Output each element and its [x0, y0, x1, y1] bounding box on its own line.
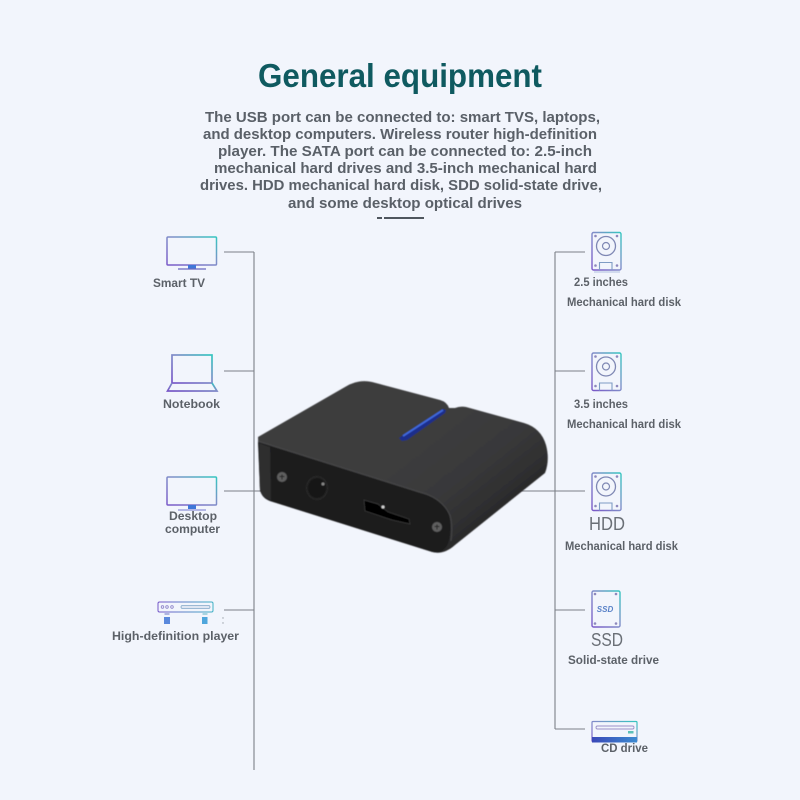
left connector lines — [224, 252, 262, 770]
item: Desktop computer — [165, 477, 220, 536]
label: Notebook: Notebook — [163, 397, 220, 411]
item: High-definition player — [112, 602, 239, 643]
item: Smart TV — [153, 237, 216, 290]
icon: SSD: SSD — [597, 605, 613, 614]
label: HDD: HDD — [589, 514, 625, 534]
item: HDD — [565, 473, 678, 553]
icon: 2.5 inch hard disk — [592, 232, 621, 272]
description text: drives. HDD mechanical hard disk, SDD solid-state drive, — [200, 177, 602, 194]
description text: mechanical hard drives and 3.5-inch mechanical hard — [214, 160, 597, 177]
label: 2.5 inches: 2.5 inches — [574, 275, 628, 289]
right screw — [432, 522, 442, 532]
device left strip — [259, 443, 271, 500]
label: Desktop computer — [165, 509, 220, 536]
label: Mechanical hard disk: Mechanical hard disk — [567, 417, 681, 431]
icon: 3.5 inch hard disk — [592, 353, 621, 390]
label: SSD: SSD — [591, 630, 623, 650]
left screw — [277, 472, 287, 482]
device edge highlight — [258, 441, 452, 541]
device front face — [258, 442, 451, 552]
label: Mechanical hard disk: Mechanical hard disk — [567, 295, 681, 309]
device: black enclosure — [258, 381, 548, 553]
icon: notebook — [168, 355, 217, 391]
label: Smart TV: Smart TV — [153, 276, 205, 290]
title: General equipment — [258, 57, 542, 94]
description text: player. The SATA port can be connected to: 2.5-inch — [218, 143, 592, 160]
label: Mechanical hard disk: Mechanical hard disk — [565, 539, 678, 553]
item: 2.5 inch disk — [567, 232, 681, 309]
item: Notebook — [163, 355, 220, 411]
description text — [200, 109, 602, 212]
item: CD drive — [592, 722, 648, 755]
label: Solid-state drive: Solid-state drive — [568, 653, 659, 667]
device body — [258, 381, 548, 553]
label: CD drive: CD drive — [601, 741, 648, 755]
icon: desktop monitor — [167, 477, 216, 510]
icon: HDD — [592, 473, 621, 510]
item: SSD — [568, 591, 659, 667]
divider under description — [377, 217, 424, 219]
icon: smart TV — [167, 237, 216, 269]
description text: The USB port can be connected to: smart TVS, laptops, — [205, 109, 600, 126]
icon: CD drive — [592, 722, 637, 742]
icon: high-definition player — [158, 602, 224, 624]
description text: and some desktop optical drives — [288, 195, 522, 212]
label: 3.5 inches: 3.5 inches — [574, 397, 628, 411]
label: High-definition player: High-definition player — [112, 629, 239, 643]
label: Desktop computer: computer — [165, 522, 220, 536]
right connector lines — [518, 252, 585, 729]
power jack — [306, 476, 328, 500]
label: Desktop computer: Desktop — [169, 509, 217, 523]
blue status light slot — [399, 409, 446, 441]
item: 3.5 inch disk — [567, 353, 681, 431]
description text: and desktop computers. Wireless router high-definition — [203, 126, 597, 143]
USB port — [364, 500, 410, 524]
